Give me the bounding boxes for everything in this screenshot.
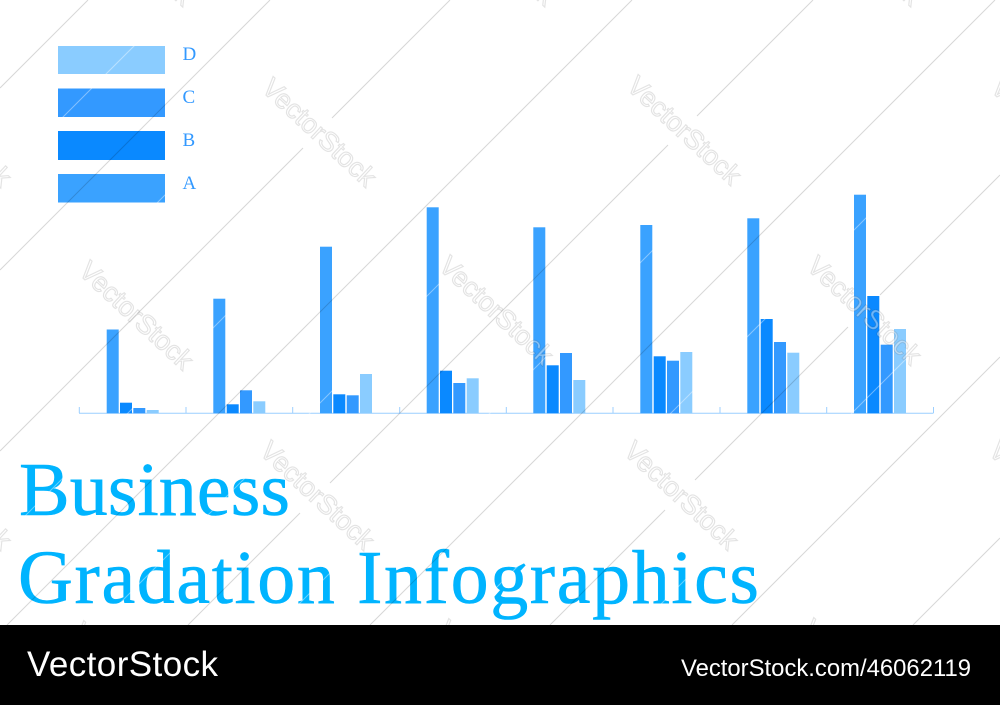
legend item D: D	[182, 44, 196, 65]
watermark text: VectorStock	[254, 435, 380, 556]
bar group 1	[107, 330, 159, 413]
watermark text: VectorStock	[73, 255, 199, 376]
legend item A	[58, 173, 196, 202]
bar group 8	[854, 195, 906, 413]
legend item C: C	[182, 87, 195, 108]
bar group 7	[747, 218, 799, 413]
legend	[58, 44, 196, 202]
bar group 4	[427, 207, 479, 413]
x axis	[79, 407, 934, 413]
legend item B	[58, 130, 195, 160]
bar group 3	[320, 247, 372, 413]
legend item D	[58, 44, 196, 74]
bar group 6	[640, 225, 692, 413]
footer bar	[0, 625, 1000, 705]
footer image id: VectorStock.com/46062119	[681, 655, 971, 682]
watermark text: VectorStock	[433, 250, 559, 371]
legend item B: B	[182, 130, 195, 151]
watermark text: V	[67, 616, 101, 651]
legend item C	[58, 87, 195, 117]
watermark text: VectorStock	[256, 72, 382, 193]
watermark text: VectorStock	[621, 70, 747, 191]
title	[18, 448, 759, 620]
watermark text: V	[432, 614, 466, 649]
bar group 5	[533, 227, 585, 413]
legend item A: A	[182, 173, 196, 194]
bar group 2	[213, 299, 265, 413]
watermark text: V	[797, 613, 831, 648]
watermark text: VectorStock	[801, 250, 927, 371]
title: Business	[19, 448, 290, 532]
title: Gradation Infographics	[18, 536, 759, 620]
footer brand: VectorStock	[27, 645, 218, 684]
bar chart	[79, 195, 934, 413]
watermark text: VectorStock	[618, 435, 744, 556]
